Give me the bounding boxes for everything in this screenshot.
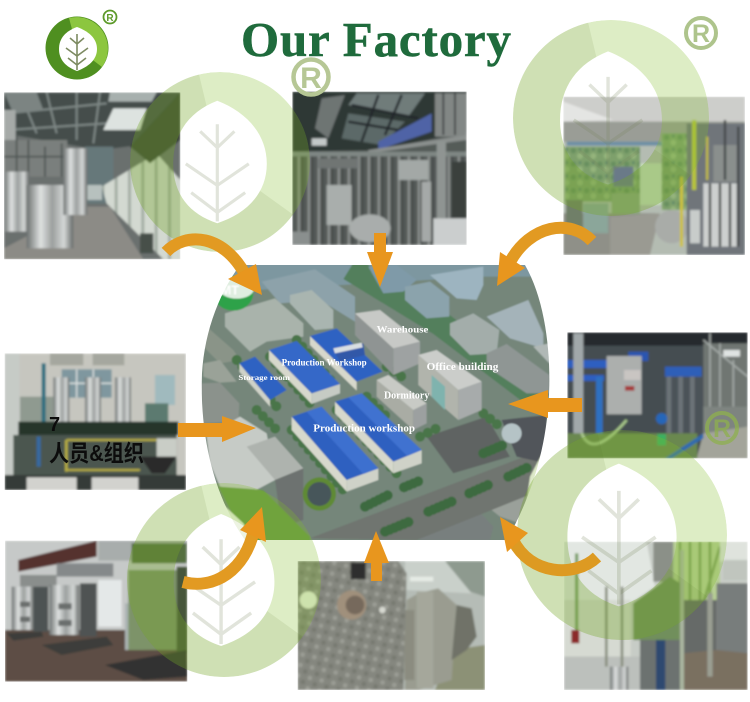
building labels: Warehouse (377, 325, 429, 336)
arrow: middle left photo to map (178, 416, 256, 442)
photo: centrifuge machines (5, 541, 187, 682)
logo: green leaf ring (46, 16, 108, 80)
watermark overlap bottom right (525, 454, 540, 502)
arrow: top right photo to map (497, 228, 592, 286)
photo caption text in Chinese: 人员&组织 (49, 440, 144, 466)
watermark: registered mark right: R (692, 20, 710, 48)
photo: reactor hall with blue sign (292, 92, 467, 245)
blue roof: upper workshop (269, 341, 340, 404)
watermark: leaf ring upper right (513, 20, 709, 216)
watermark: leaf ring lower right (517, 430, 727, 640)
building labels: Production workshop (313, 423, 415, 434)
arrow: bottom centre photo to map (364, 531, 389, 581)
photo: evaporator platform with overlaid text (5, 353, 186, 490)
map ground (202, 276, 550, 540)
photo: piping and stainless tanks (564, 542, 748, 690)
blue roof: production workshop rear (335, 393, 422, 473)
arrow: middle right photo to map (508, 390, 582, 418)
photo: freeze dryer chambers (298, 561, 485, 690)
dormitory building (377, 375, 427, 430)
building labels: Dormitory (384, 390, 429, 401)
photo caption text in Chinese: 7 (49, 414, 60, 436)
photo: fermentation tank hall (4, 92, 180, 259)
company logo badge on map: MT (221, 284, 239, 298)
building labels: Production Workshop (282, 357, 367, 367)
surrounding grey buildings (202, 265, 550, 522)
arrow: top left photo to map (166, 239, 262, 295)
blue roof: storage room (239, 357, 287, 407)
roads (313, 458, 537, 540)
watermark: leaf ring upper left (130, 72, 310, 252)
arrow: bottom right photo to map (500, 517, 597, 570)
office building (418, 350, 482, 420)
logo: registered mark (104, 10, 116, 24)
watermark: registered mark right (686, 18, 716, 48)
watermark: leaf ring lower left (127, 483, 321, 677)
photo: reactors and green plants (563, 97, 745, 255)
watermark: registered mark centre (294, 60, 328, 95)
watermark: registered mark on photo (707, 413, 737, 443)
lawn and watermark overlap bottom left (218, 486, 310, 540)
arrow: bottom left photo to map (183, 507, 266, 584)
warehouse building (355, 310, 420, 375)
arrow: top centre photo to map (367, 233, 393, 287)
tree rows (237, 340, 500, 490)
building labels: Office building (427, 362, 499, 373)
logo: registered mark: R (106, 13, 114, 24)
watermark: registered mark centre: R (300, 62, 322, 95)
photo: membrane filtration skid (567, 332, 748, 458)
blue roof: upper workshop rear (310, 328, 383, 391)
building labels: Storage room (238, 373, 291, 382)
watermark: registered mark on photo: R (713, 415, 731, 443)
central aerial view of factory campus (200, 260, 560, 550)
blue roof: production workshop front (292, 407, 378, 492)
title: Our Factory (241, 12, 512, 67)
company logo badge on map (213, 276, 254, 311)
round plaza (303, 477, 336, 511)
photo caption text in Chinese (49, 414, 144, 466)
building labels (238, 325, 499, 434)
